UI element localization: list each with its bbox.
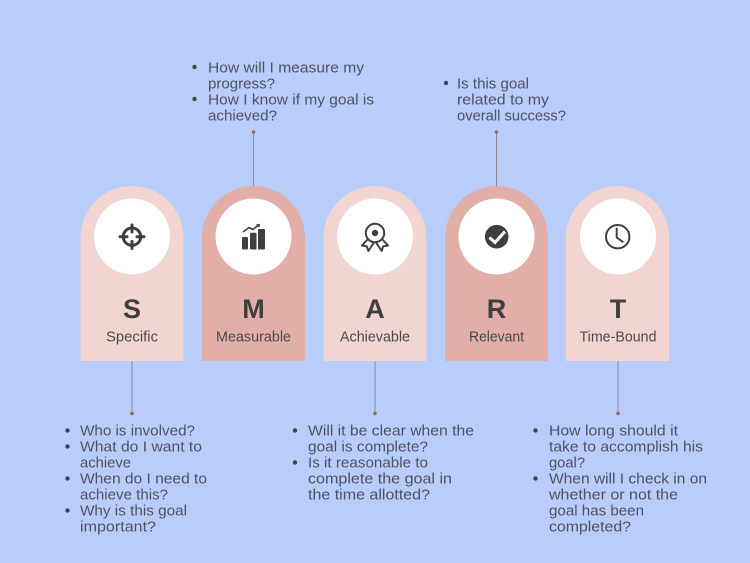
text block: Time-Bound questions: take to accomplish his xyxy=(549,438,703,456)
text block: Specific questions: achieve this? xyxy=(80,486,168,504)
connector: Specific xyxy=(130,360,134,415)
label Relevant: Relevant xyxy=(469,330,524,346)
text block: Achievable questions: the time allotted? xyxy=(308,486,430,504)
text block: Relevant questions: related to my xyxy=(457,92,550,108)
text block: Measurable questions xyxy=(192,60,374,124)
text block: Time-Bound questions: goal has been xyxy=(549,502,644,520)
label Time-Bound: Time-Bound xyxy=(580,330,656,346)
connector: Achievable xyxy=(373,360,377,415)
text block: Relevant questions: Is this goal xyxy=(457,76,529,92)
text block: Achievable questions: complete the goal in xyxy=(308,470,452,488)
label Specific: Specific xyxy=(106,330,158,346)
text block: Measurable questions: achieved? xyxy=(208,108,277,124)
text block: Specific questions: What do I want to xyxy=(80,438,202,456)
text block: Time-Bound questions xyxy=(533,422,707,536)
panel: T Time-Bound xyxy=(566,186,669,361)
connector: Relevant xyxy=(495,130,498,187)
text block: Achievable questions: Is it reasonable to xyxy=(308,454,428,472)
icon: check badge xyxy=(485,225,509,248)
label Achievable: Achievable xyxy=(340,330,410,346)
text block: Measurable questions: How I know if my goal is xyxy=(208,92,374,108)
letter M: M xyxy=(242,294,265,324)
text block: Time-Bound questions: completed? xyxy=(549,518,631,536)
letter T: T xyxy=(610,294,627,324)
letter A: A xyxy=(365,294,385,324)
label Measurable: Measurable xyxy=(216,330,291,346)
text block: Measurable questions: progress? xyxy=(208,76,275,92)
text block: Specific questions: achieve xyxy=(80,454,131,472)
text block: Measurable questions: How will I measure my xyxy=(208,60,365,76)
text block: Relevant questions xyxy=(444,76,566,124)
text block: Achievable questions xyxy=(293,422,474,504)
panel: R Relevant xyxy=(445,186,548,361)
text block: Time-Bound questions: whether or not the xyxy=(548,486,678,504)
text block: Achievable questions: Will it be clear when the xyxy=(308,422,474,440)
text block: Achievable questions: goal is complete? xyxy=(308,438,428,456)
panel: S Specific xyxy=(80,186,184,361)
icon: award ribbon xyxy=(362,224,388,251)
text block: Specific questions: Why is this goal xyxy=(80,502,187,520)
text block: Specific questions: When do I need to xyxy=(80,470,207,488)
icon: crosshair target xyxy=(120,225,144,248)
text block: Specific questions: important? xyxy=(80,518,156,536)
text block: Time-Bound questions: When will I check in on xyxy=(549,470,707,488)
panel: M Measurable xyxy=(202,186,305,361)
text block: Specific questions: Who is involved? xyxy=(80,422,195,440)
text block: Relevant questions: overall success? xyxy=(457,108,566,124)
panel: A Achievable xyxy=(324,186,426,361)
letter R: R xyxy=(487,294,506,324)
icon: clock xyxy=(606,225,629,248)
text block: Time-Bound questions: goal? xyxy=(549,454,585,472)
letter S: S xyxy=(123,294,141,324)
text block: Specific questions xyxy=(65,422,207,536)
text block: Time-Bound questions: How long should it xyxy=(549,422,679,440)
icon: rising bar chart xyxy=(242,224,265,250)
connector: Time-Bound xyxy=(616,360,620,415)
connector: Measurable xyxy=(252,130,255,187)
